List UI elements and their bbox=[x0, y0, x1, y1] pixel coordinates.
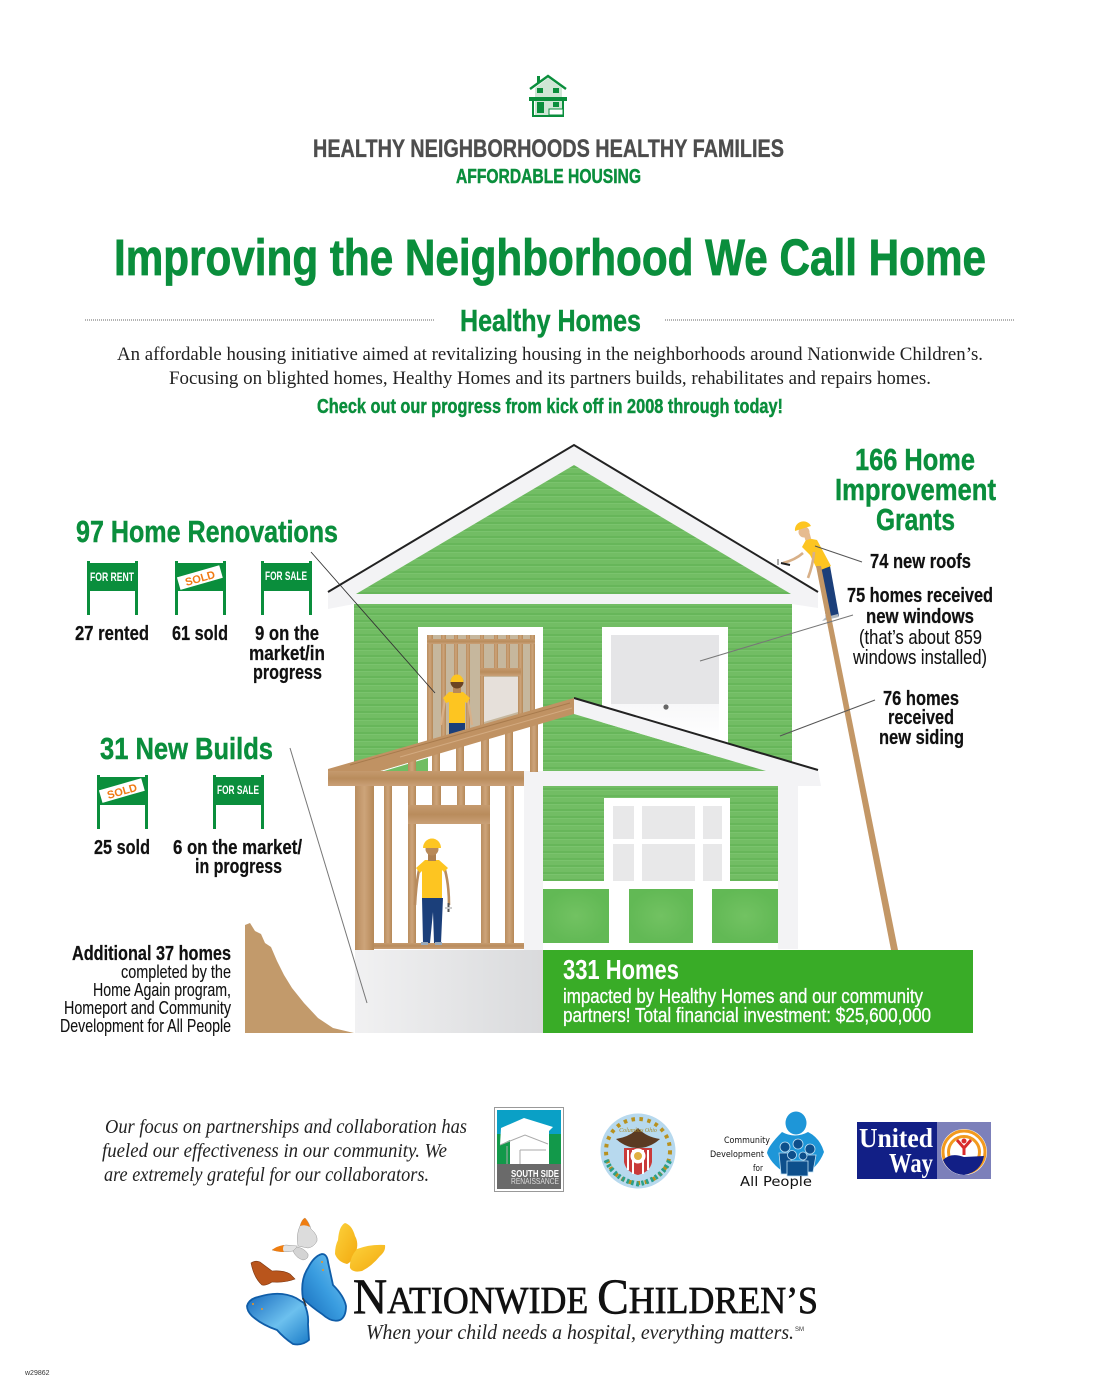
banner: 331 homes: partners! Total financial investment: $25,600,000 bbox=[563, 1005, 931, 1027]
new build stats bbox=[94, 837, 302, 878]
banner: 331 homes: impacted by Healthy Homes and our community bbox=[563, 986, 923, 1008]
logo: Community Development for All People: for bbox=[753, 1164, 763, 1174]
renovation stats bbox=[75, 623, 325, 684]
grant stats: new windows bbox=[866, 606, 974, 628]
logo: United Way: Way bbox=[889, 1148, 933, 1178]
sign: for sale: FOR SALE bbox=[217, 783, 259, 797]
worker on ladder bbox=[778, 521, 839, 621]
roof gable bbox=[328, 445, 818, 609]
renovation stats: 61 sold bbox=[172, 623, 228, 645]
sign: sold bbox=[175, 561, 226, 615]
intro text bbox=[117, 344, 983, 389]
intro text: Focusing on blighted homes, Healthy Homes and its partners builds, rehabilitates and repairs homes. bbox=[169, 368, 931, 389]
ladder bbox=[816, 566, 898, 950]
new build stats: in progress bbox=[195, 856, 282, 878]
wordmark: Nationwide Children's: NATIONWIDE CHILDREN’S bbox=[353, 1268, 818, 1324]
logo: South Side Renaissance: SOUTH SIDE bbox=[511, 1169, 559, 1180]
banner: 331 homes: 331 Homes bbox=[563, 954, 679, 985]
subheading: affordable housing: AFFORDABLE HOUSING bbox=[456, 166, 641, 188]
sign: sold: SOLD bbox=[184, 569, 217, 589]
grant stats: received bbox=[888, 707, 954, 729]
new build stats: 6 on the market/ bbox=[173, 837, 302, 859]
banner: 331 homes bbox=[543, 950, 973, 1033]
logo: Community Development for All People bbox=[710, 1112, 824, 1190]
logo: City of Columbus seal bbox=[600, 1114, 676, 1188]
heading: new builds: 31 New Builds bbox=[100, 731, 273, 766]
heading: home improvement grants bbox=[835, 442, 996, 537]
lower section white frame bbox=[355, 714, 798, 950]
sign: for rent bbox=[87, 561, 138, 615]
heading: program name: HEALTHY NEIGHBORHOODS HEALTHY FAMILIES bbox=[313, 135, 784, 163]
foundation bbox=[355, 950, 543, 1033]
logo: United Way: United bbox=[859, 1123, 933, 1153]
intro text: An affordable housing initiative aimed at revitalizing housing in the neighborhoods around Nationwide Children’s. bbox=[117, 344, 983, 365]
lower right siding and window bbox=[543, 714, 778, 949]
heading: home renovations: 97 Home Renovations bbox=[76, 514, 338, 549]
worker in upper window bbox=[441, 674, 472, 737]
renovation stats: 27 rented bbox=[75, 623, 149, 645]
additional homes text bbox=[60, 943, 231, 1036]
grant stats: 76 homes bbox=[883, 688, 959, 710]
additional homes text: Homeport and Community bbox=[64, 998, 231, 1018]
icon: house logo bbox=[529, 76, 567, 117]
heading: home improvement grants: Improvement bbox=[835, 472, 996, 507]
new build stats: 25 sold bbox=[94, 837, 150, 859]
sign: sold bbox=[97, 775, 148, 829]
heading: home improvement grants: Grants bbox=[876, 502, 955, 537]
additional homes text: Development for All People bbox=[60, 1016, 231, 1036]
grant stats: 75 homes received bbox=[847, 585, 993, 607]
leader lines bbox=[290, 546, 875, 1003]
logo: United Way bbox=[857, 1122, 991, 1179]
sign: for sale bbox=[213, 775, 264, 829]
partnership statement bbox=[102, 1116, 467, 1186]
blue butterfly bbox=[247, 1254, 346, 1344]
logo: City of Columbus seal: Columbus Ohio bbox=[619, 1128, 657, 1134]
additional homes text: Additional 37 homes bbox=[72, 943, 231, 965]
heading: home improvement grants: 166 Home bbox=[855, 442, 975, 477]
additional homes text: completed by the bbox=[121, 962, 231, 982]
partnership statement: fueled our effectiveness in our community. We bbox=[102, 1140, 447, 1162]
job code: w29862 bbox=[24, 1370, 50, 1377]
main wall bbox=[354, 604, 792, 771]
hill of dirt bbox=[245, 923, 354, 1033]
additional homes text: Home Again program, bbox=[93, 980, 231, 1000]
sign: for sale: FOR SALE bbox=[265, 569, 307, 583]
grant stats bbox=[847, 551, 993, 749]
grant stats: new siding bbox=[879, 727, 964, 749]
renovation stats: market/in bbox=[249, 643, 325, 665]
worker in doorway bbox=[415, 838, 452, 945]
sign: sold: SOLD bbox=[106, 782, 139, 802]
logo: Community Development for All People: Community bbox=[724, 1136, 770, 1146]
upper left window with wood framing bbox=[418, 627, 543, 771]
sign: for rent: FOR RENT bbox=[90, 570, 134, 584]
renovation stats: 9 on the bbox=[255, 623, 319, 645]
lower roof bbox=[524, 698, 821, 786]
wood framing bbox=[328, 698, 574, 950]
white butterfly bbox=[272, 1218, 317, 1260]
orange butterfly bbox=[251, 1261, 295, 1285]
logo: South Side Renaissance bbox=[494, 1108, 564, 1192]
partnership statement: are extremely grateful for our collaborators. bbox=[104, 1164, 429, 1186]
service mark: SM bbox=[795, 1327, 804, 1333]
logo: South Side Renaissance: RENAISSANCE bbox=[511, 1177, 559, 1186]
house illustration bbox=[245, 445, 973, 1033]
logo: Community Development for All People: All People bbox=[740, 1175, 812, 1190]
logo: Community Development for All People: Development bbox=[710, 1150, 765, 1160]
tagline: When your child needs a hospital, everything matters. bbox=[366, 1320, 794, 1344]
section heading: Healthy Homes: Healthy Homes bbox=[460, 303, 641, 338]
partnership statement: Our focus on partnerships and collaboration has bbox=[105, 1116, 467, 1138]
yellow butterfly bbox=[335, 1223, 385, 1272]
upper right window bbox=[602, 627, 728, 757]
sign: for sale bbox=[261, 561, 312, 615]
renovation stats: progress bbox=[253, 662, 322, 684]
grant stats: (that’s about 859 bbox=[859, 627, 982, 649]
logo: Nationwide Children's butterflies bbox=[247, 1218, 385, 1344]
grant stats: windows installed) bbox=[852, 647, 987, 669]
callout: progress line: Check out our progress from kick off in 2008 through today! bbox=[317, 396, 783, 418]
grant stats: 74 new roofs bbox=[870, 551, 971, 573]
